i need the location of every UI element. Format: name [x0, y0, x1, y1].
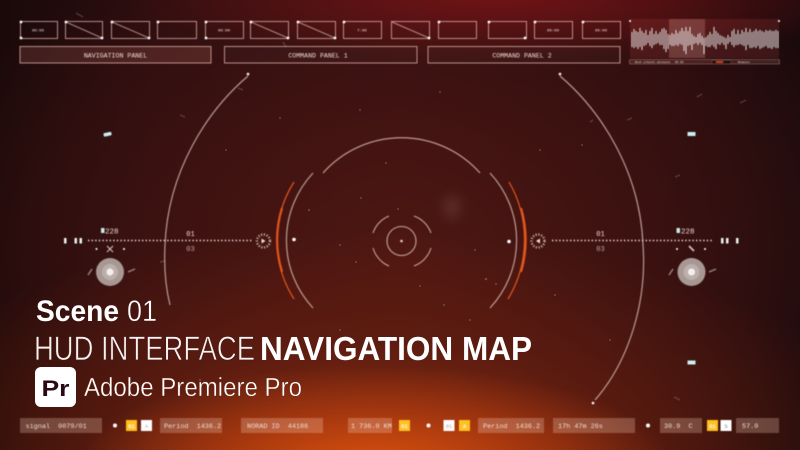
- icon: premiere pro logo: Pr: [42, 376, 70, 401]
- panel: navigation panel: [20, 46, 211, 63]
- bottom status bar: 17h 47m 26s: [558, 423, 603, 431]
- bottom status bar: Period 1436.2: [164, 423, 221, 431]
- bottom status bar: 01: [709, 423, 716, 430]
- outer arc left: [165, 73, 249, 305]
- left navigation readout: 228: [105, 228, 119, 236]
- left navigation readout: [64, 228, 270, 286]
- panel: navigation panel: NAVIGATION PANEL: [84, 52, 147, 60]
- title: scene: Scene: [36, 295, 119, 328]
- bottom status bar: 01: [401, 423, 408, 430]
- bottom status bar: 01: [446, 423, 453, 430]
- adobe premiere pro label: Adobe Premiere Pro: [84, 374, 302, 402]
- top button row: 00:00: [595, 30, 608, 34]
- right navigation readout: 03: [596, 246, 605, 254]
- right navigation readout: 228: [681, 228, 695, 236]
- bottom status bar: 01: [128, 423, 135, 430]
- central targeting rings: [286, 138, 517, 308]
- right navigation readout: [532, 228, 738, 286]
- outer arc right: [559, 73, 644, 404]
- bottom status bar: S: [724, 423, 728, 430]
- right navigation readout: 01: [596, 231, 605, 239]
- waveform chart: [629, 19, 780, 64]
- title: hud interface navigation map: HUD INTERFACE: [34, 330, 255, 368]
- bottom status bar: A: [463, 423, 467, 430]
- bottom status bar: NORAD ID 44186: [247, 423, 308, 431]
- bottom status bar: 30.9 C: [664, 423, 693, 431]
- marker dots: [292, 238, 511, 243]
- reticle: [373, 216, 431, 266]
- title: hud interface navigation map: [34, 330, 532, 368]
- orange side arcs: [277, 182, 526, 299]
- waveform chart: Next orbital distance: [635, 60, 671, 64]
- top button row: 00:00: [547, 30, 560, 34]
- title: scene: 01: [127, 295, 157, 328]
- top button row: [20, 21, 621, 39]
- panel: command panel 2: COMMAND PANEL 2: [492, 52, 552, 60]
- top button row: 00:00: [218, 30, 231, 34]
- cyan markers: [103, 132, 696, 364]
- icon: premiere pro logo: [35, 367, 76, 407]
- left navigation readout: 03: [186, 246, 195, 254]
- bottom status bar: 1 736.0 KM: [351, 423, 392, 431]
- bottom status bar: signal 0079/01: [26, 423, 87, 431]
- title: hud interface navigation map: NAVIGATION MAP: [260, 331, 532, 368]
- bottom status bar: Period 1436.2: [483, 423, 540, 431]
- left navigation readout: 01: [186, 231, 195, 239]
- panel: command panel 1: COMMAND PANEL 1: [288, 52, 348, 60]
- panel: command panel 1: [224, 46, 417, 63]
- bottom status bar: [20, 418, 779, 433]
- panel: command panel 2: [428, 46, 620, 63]
- top button row: 00:00: [32, 30, 45, 34]
- waveform chart: 00 00: [675, 61, 684, 64]
- top button row: T:00: [357, 30, 367, 34]
- bottom status bar: 57.0: [742, 423, 758, 431]
- waveform chart: Remains: [738, 60, 750, 64]
- bottom status bar: A: [145, 423, 149, 430]
